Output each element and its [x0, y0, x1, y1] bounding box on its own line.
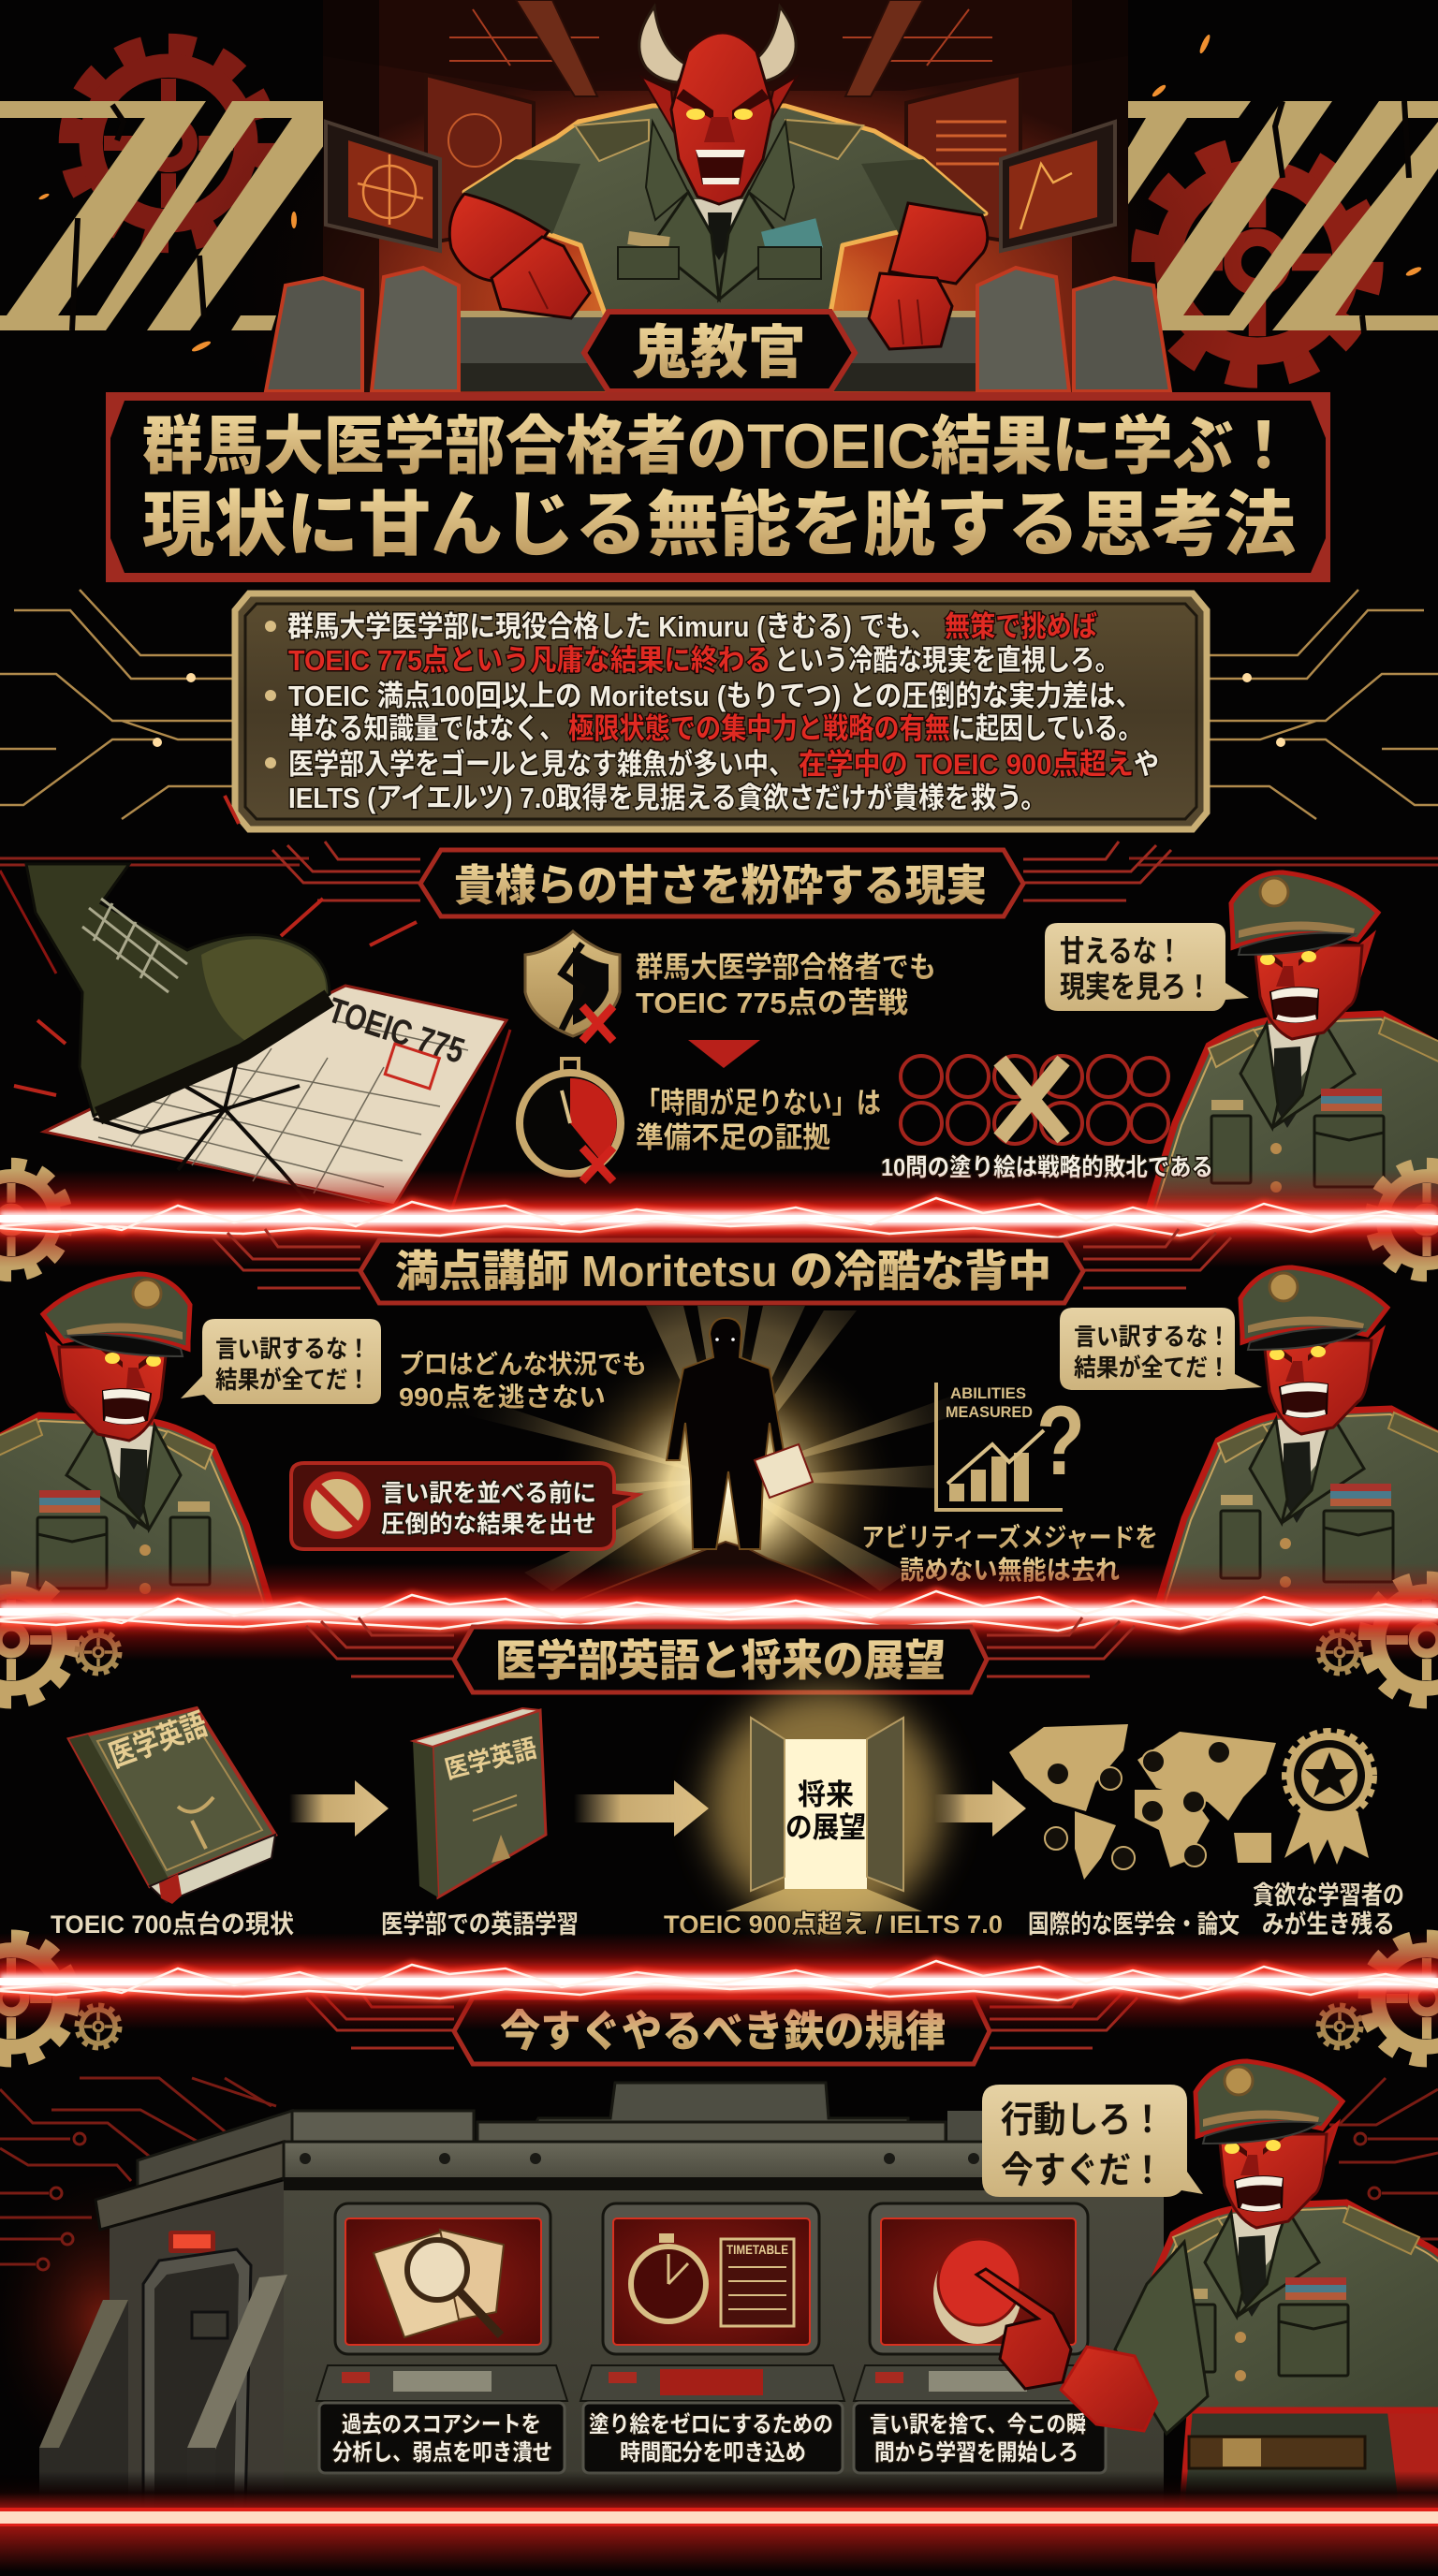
control pads: [316, 2365, 1106, 2401]
console top tiers: [138, 2083, 1144, 2190]
speech bubble left: [181, 1319, 381, 1404]
action label 3: [854, 2403, 1106, 2473]
title line 2: 現状に甘んじる無能を脱する思考法: [142, 486, 1296, 565]
bullet 2: 極限状態での集中力と戦略の有無: [568, 712, 950, 745]
icon: cracked shield: [525, 931, 620, 1041]
callout: results before excuses: 圧倒的な結果を出せ: [381, 1510, 596, 1538]
bullet 2: [265, 680, 1142, 745]
speech bubble left: 言い訳するな！: [215, 1335, 370, 1363]
section 3 heading: 医学部英語と将来の展望: [495, 1636, 946, 1685]
icon: no excuses: [307, 1475, 367, 1535]
section 1 heading: 貴様らの甘さを粉砕する現実: [454, 861, 987, 910]
steel console: [37, 2083, 1164, 2510]
pointing arm and hand: [976, 2269, 1157, 2431]
text: score fact: [636, 951, 936, 1019]
abilities measured chart: MEASURED: [946, 1403, 1033, 1421]
console side wall: [37, 2181, 285, 2510]
title line 1: 群馬大医学部合格者のTOEIC結果に学ぶ！: [142, 411, 1294, 482]
score sheet under boot: TOEIC 775: [323, 991, 469, 1072]
bullet 1: 群馬大学医学部に現役合格した Kimuru (きむる) でも、: [287, 610, 936, 643]
speech bubble: act now: [982, 2085, 1203, 2197]
demon instructor: [449, 7, 988, 349]
officer left, section 2: [0, 1274, 276, 1623]
silhouette figure: [667, 1318, 791, 1549]
section 4 heading: [306, 1989, 1137, 2064]
bullet 3: IELTS (アイエルツ) 7.0取得を見据える貪欲さだけが貴様を救う。: [288, 782, 1047, 814]
officer right, section 2: [1154, 1267, 1438, 1617]
section 4 heading: 今すぐやるべき鉄の規律: [500, 2007, 946, 2056]
demon body: [464, 106, 986, 314]
award rosette: [1284, 1733, 1372, 1865]
score sheet under boot: [44, 986, 506, 1206]
speech bubble: act now: 行動しろ！: [1001, 2100, 1164, 2141]
circuit lines around section 4: [0, 2078, 1438, 2270]
speech bubble right: [1060, 1308, 1262, 1390]
sleeve: [1115, 2242, 1208, 2434]
text: pro never misses: [399, 1350, 647, 1412]
action label 2: 時間配分を叩き込め: [620, 2440, 806, 2466]
floor fade to red: [0, 2471, 1438, 2510]
gears at divider 1: [0, 1164, 1438, 1275]
section 3 heading: [306, 1617, 1135, 1692]
action label 1: [319, 2403, 565, 2473]
red glow left of console: [0, 2162, 225, 2481]
bullet 3: [265, 748, 1159, 814]
section 1 heading: [0, 842, 1438, 916]
door with light: の展望: [785, 1811, 866, 1844]
lightning divider 2: [0, 1563, 1438, 1661]
title panel: [106, 392, 1330, 582]
speech bubble right: 結果が全てだ！: [1074, 1354, 1230, 1382]
red lines around boot: [0, 871, 510, 1217]
speech bubble right: 言い訳するな！: [1074, 1323, 1230, 1351]
text: abilities measured warning: 読めない無能は去れ: [900, 1556, 1120, 1585]
action label 2: [583, 2403, 843, 2473]
bullet 3: 在学中の TOEIC 900点超え: [799, 748, 1134, 781]
book 1: 医学英語: [105, 1706, 212, 1774]
bottom glowing bar: [0, 2508, 1438, 2571]
silhouette with halo: [459, 1306, 964, 1647]
text: score fact: TOEIC 775点の苦戦: [636, 987, 908, 1019]
screen 2: time plan: TIMETABLE: [726, 2242, 788, 2257]
command room background: [323, 0, 1128, 393]
action label 3: 言い訳を捨て、今この瞬: [870, 2412, 1086, 2437]
bullet 2: 単なる知識量ではなく、: [288, 712, 565, 745]
section 2 heading: [213, 1229, 1231, 1303]
book 1: [69, 1706, 275, 1904]
door with light: [709, 1690, 943, 1924]
stone bunker wall: [266, 268, 1170, 391]
side door: [39, 2231, 287, 2510]
flow step labels: 国際的な医学会・論文: [1028, 1910, 1240, 1939]
speech bubble left: 結果が全てだ！: [215, 1366, 370, 1394]
callout: results before excuses: 言い訳を並べる前に: [381, 1479, 596, 1507]
speech bubble: don't be soft: [1045, 923, 1249, 1011]
speech bubble: act now: 今すぐだ！: [1001, 2151, 1164, 2191]
lower body and belt: [1181, 2378, 1438, 2513]
text: pro never misses: プロはどんな状況でも: [399, 1350, 647, 1379]
demon horns: [639, 7, 796, 82]
screen 3: start button: [870, 2203, 1088, 2354]
red gears behind slashes: [71, 47, 1369, 373]
text: lack of time: 準備不足の証拠: [636, 1121, 830, 1154]
flow step labels: TOEIC 700点台の現状: [51, 1910, 294, 1939]
book 2: 医学英語: [442, 1734, 539, 1784]
monitor left: [326, 122, 440, 251]
flow step labels: 医学部での英語学習: [381, 1910, 579, 1939]
section 2 heading: 満点講師 Moritetsu の冷酷な背中: [395, 1247, 1051, 1295]
summary panel: [235, 593, 1207, 829]
text: lack of time: 「時間が足りない」は: [636, 1087, 881, 1120]
world map with network: [1009, 1724, 1276, 1880]
arrow 2: [574, 1780, 709, 1837]
flow step labels: TOEIC 900点超え / IELTS 7.0: [664, 1910, 1003, 1939]
demon head: [641, 33, 797, 204]
action label 1: 過去のスコアシートを: [342, 2412, 541, 2437]
caption: coloring answers: 10問の塗り絵は戦略的敗北である: [881, 1153, 1213, 1181]
officer pointing, section 4: [976, 2061, 1438, 2513]
bullet 1: TOEIC 775点という凡庸な結果に終わる: [288, 644, 771, 677]
speech bubble: don't be soft: 現実を見ろ！: [1060, 970, 1211, 1003]
abilities measured chart: ABILITIES: [950, 1384, 1026, 1402]
arrow down: [688, 1040, 760, 1068]
door with light: 将来: [798, 1778, 854, 1811]
gold slashes right: [1077, 101, 1438, 333]
screen 2: time plan: [603, 2203, 819, 2354]
lightning divider 3: [0, 1933, 1438, 2030]
book 2: [413, 1708, 546, 1897]
flow step labels: [51, 1881, 1404, 1939]
icon: stopwatch: [520, 1059, 621, 1181]
bullet 2: TOEIC 満点100回以上の Moritetsu (もりてつ) との圧倒的な実力差は、: [288, 680, 1142, 712]
gold slashes left: [0, 101, 356, 330]
bullet 1: 無策で挑めば: [945, 610, 1097, 643]
bullet 3: 医学部入学をゴールと見なす雑魚が多い中、: [288, 748, 794, 781]
bullet 2: に起因している。: [951, 712, 1142, 745]
callout: results before excuses: [291, 1463, 638, 1549]
lightning divider 1: [0, 1170, 1438, 1267]
text: score fact: 群馬大医学部合格者でも: [636, 951, 936, 984]
circuit lines right of summary: [1208, 590, 1438, 819]
arrow 1: [289, 1780, 389, 1837]
gears at divider 3: [0, 1938, 1438, 2059]
oni instructor badge: 鬼教官: [632, 321, 806, 386]
action label 1: 分析し、弱点を叩き潰せ: [332, 2440, 552, 2466]
abilities measured chart: ?: [1036, 1386, 1085, 1496]
gears at divider 2: [0, 1579, 1438, 1701]
text: abilities measured warning: [861, 1522, 1158, 1585]
bullet 3: や: [1134, 748, 1159, 781]
text: pro never misses: 990点を逃さない: [399, 1383, 606, 1412]
monitor right: [1001, 122, 1115, 251]
flow step labels: みが生き残る: [1262, 1910, 1395, 1939]
bullet 1: という冷酷な現実を直視しろ。: [774, 644, 1120, 677]
action label 3: 間から学習を開始しろ: [874, 2440, 1078, 2466]
officer right, section 1: [1145, 872, 1438, 1222]
circuit lines left of summary: [0, 590, 234, 819]
text: abilities measured warning: アビリティーズメジャードを: [861, 1522, 1158, 1552]
demon arms and fists: [449, 194, 988, 349]
stomping boot: [14, 796, 417, 1116]
text: lack of time: [636, 1087, 881, 1154]
flow step labels: 貪欲な学習者の: [1253, 1881, 1404, 1910]
embers: [38, 34, 1422, 353]
abilities measured chart: [936, 1383, 1085, 1510]
certificate: [755, 1444, 813, 1498]
bullet 1: [265, 610, 1120, 677]
answer bubbles with gold X: [901, 1056, 1168, 1144]
speech bubble: don't be soft: 甘えるな！: [1060, 934, 1181, 968]
oni instructor badge: [584, 312, 855, 391]
side glow: [187, 0, 1255, 580]
action label 2: 塗り絵をゼロにするための: [589, 2411, 833, 2437]
screen 1: analysis: [335, 2203, 550, 2354]
arrow 3: [934, 1780, 1026, 1837]
header illustration: [71, 0, 1369, 580]
command room and demon: [38, 0, 1422, 393]
